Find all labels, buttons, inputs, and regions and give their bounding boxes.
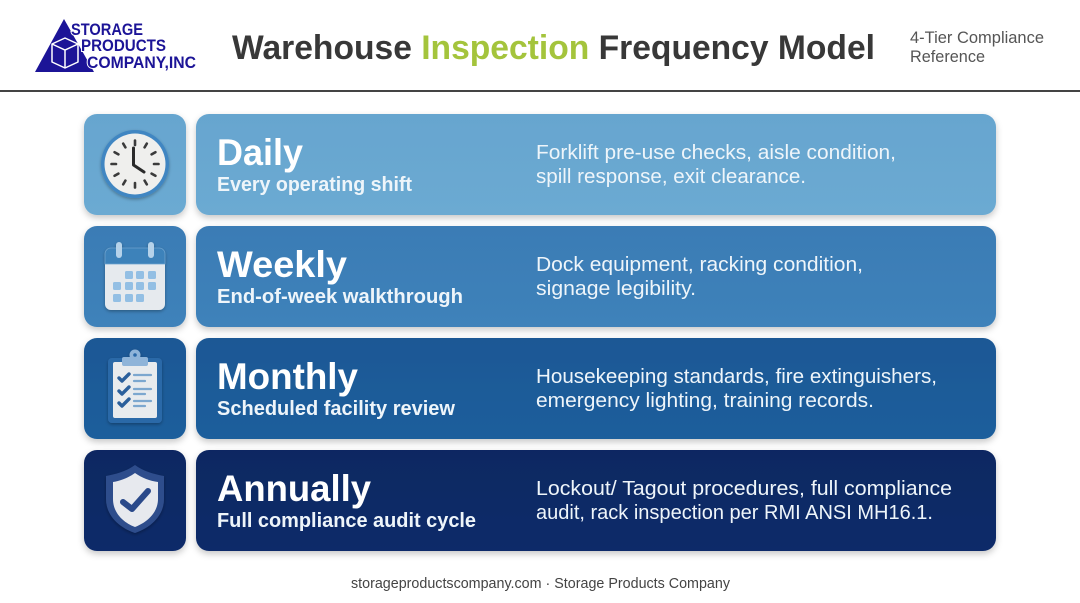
description: daily	[536, 141, 896, 188]
panel: weekly icon tile	[84, 226, 186, 327]
title: Warehouse Inspection Frequency Model	[232, 29, 875, 67]
panel: monthly icon tile	[84, 338, 186, 439]
heading: annually: Annually	[217, 468, 371, 509]
description: monthly: emergency lighting, training records.	[536, 389, 874, 412]
logo: Storage Products Company	[35, 19, 196, 72]
icon: clock	[101, 130, 169, 198]
description: weekly: signage legibility.	[536, 277, 696, 300]
panel: annually	[196, 450, 996, 551]
panel: monthly	[196, 338, 996, 439]
icon: calendar	[105, 242, 165, 310]
cadence: monthly: Scheduled facility review	[217, 398, 455, 420]
description: weekly	[536, 253, 863, 300]
cadence: daily: Every operating shift	[217, 174, 412, 196]
icon: shield	[106, 465, 164, 533]
panel: weekly	[196, 226, 996, 327]
heading: weekly: Weekly	[217, 244, 347, 285]
logo: Storage Products Company: STORAGE	[71, 21, 143, 39]
description: monthly: Housekeeping standards, fire extinguishers,	[536, 365, 937, 388]
panel: daily icon tile	[84, 114, 186, 215]
panel: annually icon tile	[84, 450, 186, 551]
cadence: weekly: End-of-week walkthrough	[217, 286, 463, 308]
heading: monthly: Monthly	[217, 356, 358, 397]
panel: daily	[196, 114, 996, 215]
description: daily: Forklift pre-use checks, aisle condition,	[536, 141, 896, 164]
header rule	[0, 90, 1080, 92]
description: daily: spill response, exit clearance.	[536, 165, 806, 188]
description: annually	[536, 477, 952, 524]
logo: Storage Products Company: COMPANY,INC	[87, 54, 196, 72]
description: annually: audit, rack inspection per RMI ANSI MH16.1.	[536, 501, 933, 524]
description: weekly: Dock equipment, racking condition,	[536, 253, 863, 276]
description: annually: Lockout/ Tagout procedures, full compliance	[536, 477, 952, 500]
footer: storageproductscompany.com · Storage Products Company	[351, 576, 731, 592]
subtitle: 4-Tier Compliance	[910, 29, 1044, 47]
subtitle: Reference	[910, 48, 985, 66]
heading: daily: Daily	[217, 132, 303, 173]
description: monthly	[536, 365, 937, 412]
logo: Storage Products Company: PRODUCTS	[81, 37, 166, 55]
cadence: annually: Full compliance audit cycle	[217, 510, 476, 532]
subtitle	[910, 29, 1044, 66]
icon: clipboard	[108, 350, 162, 423]
